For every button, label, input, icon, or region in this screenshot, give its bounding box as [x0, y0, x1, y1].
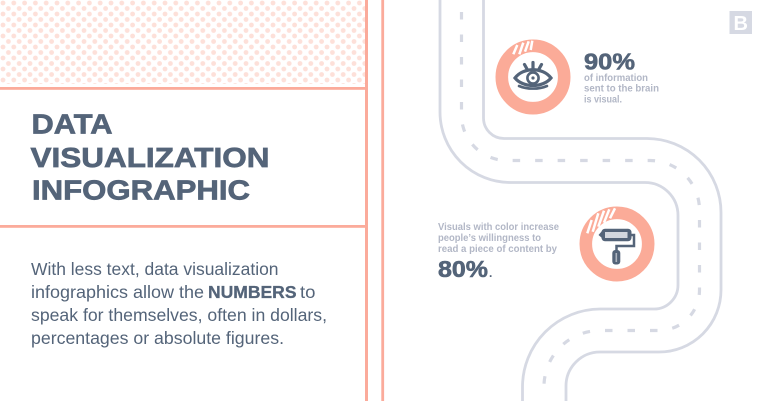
- body paragraph: to: [300, 282, 316, 302]
- stat caption: [584, 73, 659, 106]
- stat: 90 percent: 90%: [584, 48, 635, 74]
- stat caption: Visuals with color increase: [438, 222, 559, 233]
- stat caption: people’s willingness to: [438, 233, 541, 244]
- body paragraph: infographics allow the: [31, 282, 204, 302]
- brand badge: [730, 11, 752, 35]
- stat caption: [438, 222, 559, 255]
- icon: eye: [515, 62, 551, 89]
- brand badge: B: [734, 13, 748, 35]
- body paragraph: speak for themselves, often in dollars,: [31, 305, 327, 325]
- stat: 90 percent: [584, 48, 659, 106]
- donut: 90 percent with eye icon: [502, 41, 564, 108]
- body paragraph: With less text, data visualization: [31, 259, 278, 279]
- body paragraph: percentages or absolute figures.: [31, 328, 284, 348]
- stat caption: is visual.: [584, 94, 622, 106]
- title: VISUALIZATION: [30, 142, 270, 173]
- icon: paint roller: [598, 229, 634, 264]
- stat: 80 percent: 80%: [438, 256, 488, 282]
- dotted pattern banner: [0, 0, 365, 84]
- title: DATA: [32, 108, 112, 140]
- donut: 80 percent with paint roller icon: [586, 208, 648, 275]
- donut highlight stripes: [587, 208, 615, 233]
- stat caption: read a piece of content by: [438, 244, 557, 255]
- stat: 80 percent: .: [489, 266, 492, 280]
- winding road: [440, 0, 721, 401]
- donut highlight stripes: [513, 41, 532, 54]
- stat: 80 percent: [438, 222, 559, 282]
- title: [30, 108, 270, 206]
- left panel frame lines: [0, 0, 384, 401]
- body paragraph: [31, 259, 327, 348]
- stat caption: sent to the brain: [584, 84, 659, 95]
- title: INFOGRAPHIC: [32, 175, 250, 206]
- stat caption: of information: [584, 73, 648, 84]
- body paragraph: NUMBERS: [208, 282, 296, 302]
